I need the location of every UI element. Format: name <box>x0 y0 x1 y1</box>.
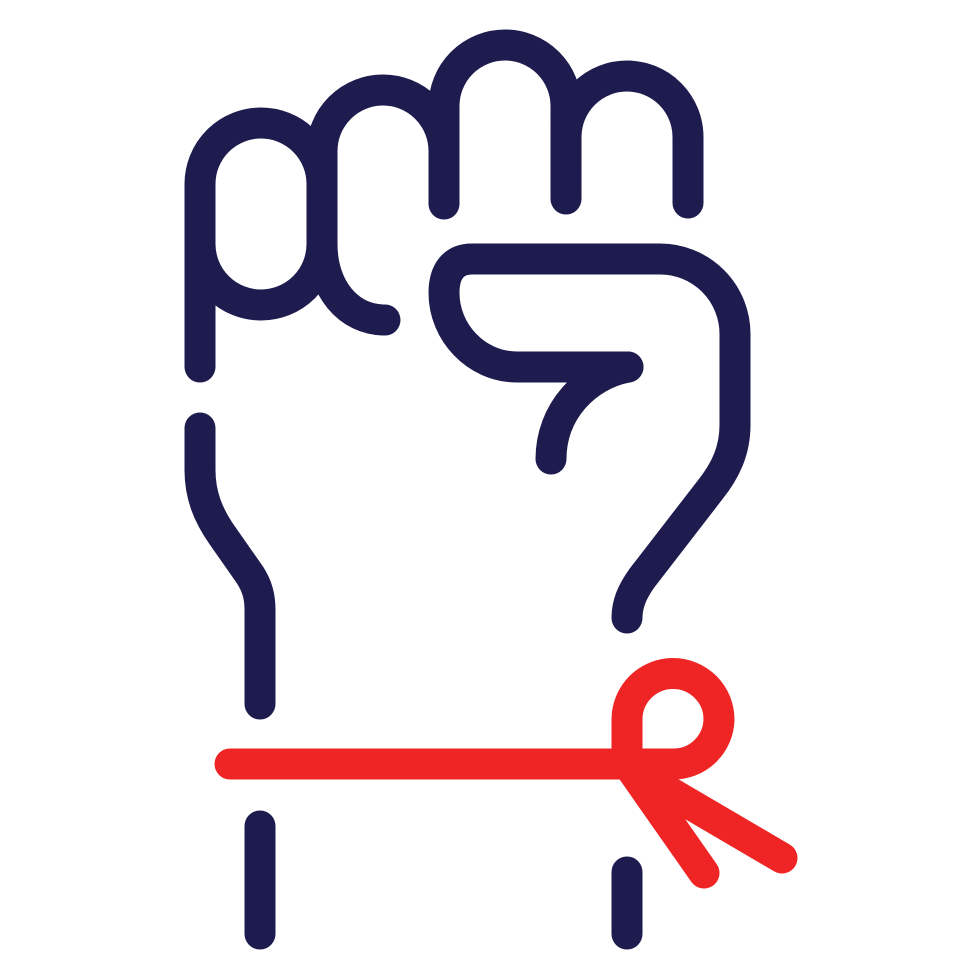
left side of the wrist <box>200 428 260 704</box>
pinky finger <box>200 123 322 367</box>
ring finger with curl <box>322 90 444 320</box>
thumb crease <box>551 367 628 459</box>
lower wrist left <box>244 826 276 934</box>
icon: fist in navy outline <box>200 45 735 934</box>
middle finger <box>444 45 566 199</box>
thread tail short <box>627 763 704 873</box>
thread across wrist and loop <box>230 674 719 764</box>
index finger <box>566 76 688 203</box>
thumb and right side of the hand <box>444 259 735 618</box>
icon: red thread with bow <box>230 674 782 873</box>
thread tail long <box>661 787 782 858</box>
lower wrist right <box>612 872 642 934</box>
